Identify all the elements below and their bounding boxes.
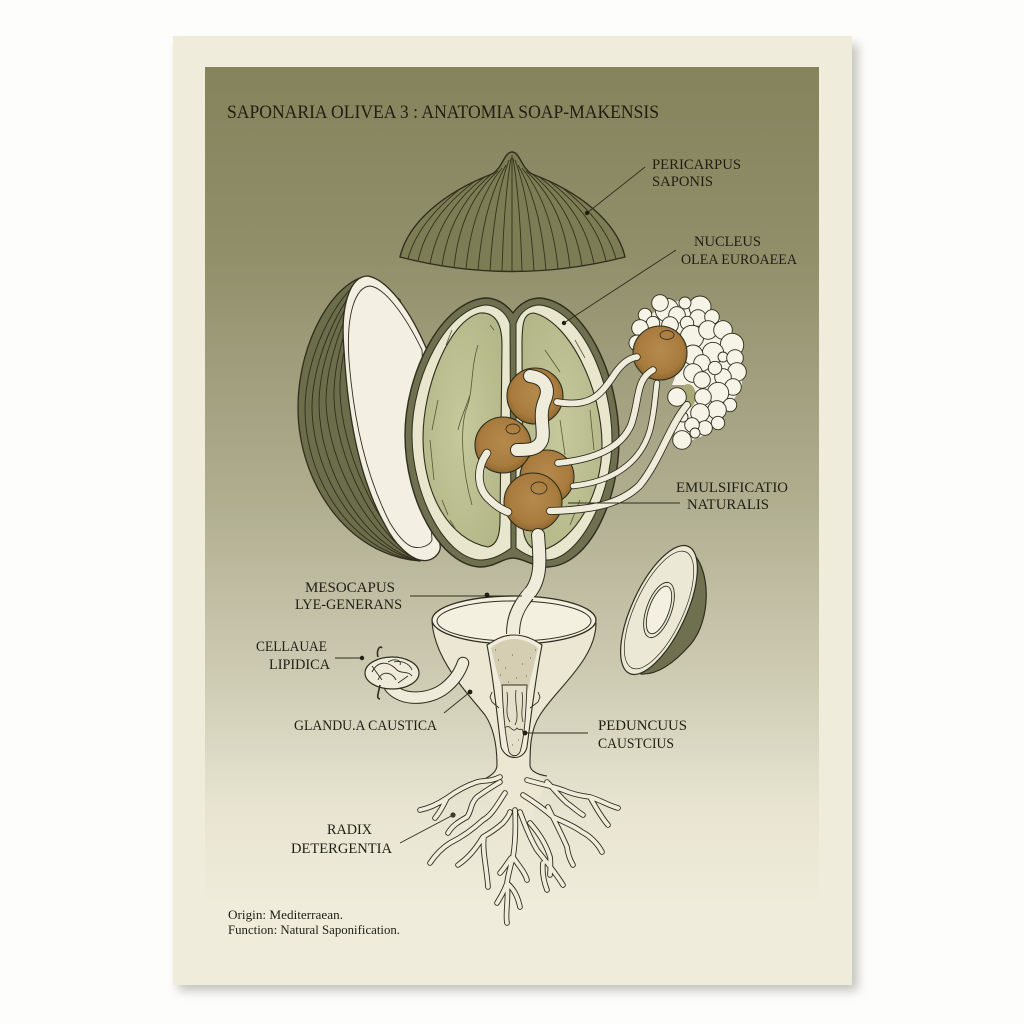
label: cellauae lipidica: CELLAUAE <box>256 639 327 655</box>
label: cellauae lipidica <box>256 639 364 673</box>
illustration: cup, stem and roots <box>365 592 618 923</box>
gland tube fill <box>390 663 463 698</box>
label: pericarpus saponis: PERICARPUS <box>652 157 741 173</box>
shell cream face <box>343 276 440 561</box>
seed chamber tan fill <box>491 639 538 690</box>
roots fill <box>420 777 618 923</box>
label: cellauae lipidica: LIPIDICA <box>269 657 330 673</box>
label: radix detergentia: RADIX <box>327 822 372 838</box>
kidney cell <box>365 647 419 699</box>
label: glandula caustica <box>294 690 472 734</box>
disc hole <box>637 578 681 642</box>
illustration: oil globules and tubes <box>475 326 687 634</box>
footer note: Function: Natural Saponification. <box>228 923 400 937</box>
fruit outer rind <box>405 298 619 567</box>
label: emulsificatio naturalis: EMULSIFICATIO <box>676 480 788 496</box>
foam backing blob <box>640 300 742 445</box>
disc inner rim <box>610 542 708 678</box>
label: pericarpus saponis: SAPONIS <box>652 174 713 190</box>
label: emulsificatio naturalis <box>568 480 788 513</box>
stem entering cup <box>513 595 528 634</box>
peduncle seed chamber <box>487 635 542 758</box>
footer note <box>228 908 400 937</box>
illustration: left half shell <box>298 276 440 561</box>
label: glandula caustica: GLANDU.A CAUSTICA <box>294 718 437 734</box>
title: SAPONARIA OLIVEA 3 : ANATOMIA SOAP-MAKENSIS <box>227 103 659 123</box>
label: mesocapus lye-generans: MESOCAPUS <box>305 580 395 596</box>
foam olive gap <box>680 384 696 408</box>
label: radix detergentia: DETERGENTIA <box>291 841 392 857</box>
globule 4 <box>504 473 562 531</box>
cup rim <box>432 596 596 644</box>
label: peduncuus caustcius: PEDUNCUUS <box>598 718 687 734</box>
illustration: pericarp cap <box>400 152 625 273</box>
fruit cream flesh left <box>412 305 511 560</box>
connecting tubes outline <box>479 357 687 634</box>
label: peduncuus caustcius: CAUSTCIUS <box>598 736 674 752</box>
label: pericarpus saponis <box>585 157 741 215</box>
label: nucleus olea euroaeea <box>562 234 797 325</box>
illustration: cut disc slice <box>605 535 713 685</box>
paper sheet <box>173 36 852 985</box>
cup rim inner <box>437 601 591 641</box>
cup body fill <box>432 622 596 840</box>
gland tube outline <box>390 663 463 698</box>
cup body outline <box>432 622 596 781</box>
disc outer side <box>641 549 706 674</box>
footer note: Origin: Mediterraean. <box>228 908 343 922</box>
label: peduncuus caustcius <box>523 718 687 752</box>
globule 2 <box>475 417 531 473</box>
label: radix detergentia <box>291 812 456 857</box>
disc face <box>605 535 713 685</box>
background panel <box>205 67 819 907</box>
label: nucleus olea euroaeea: OLEA EUROAEEA <box>681 252 797 268</box>
left green lobe <box>423 313 502 547</box>
label: mesocapus lye-generans <box>295 580 522 613</box>
label: emulsificatio naturalis: NATURALIS <box>687 497 769 513</box>
lobe veins <box>430 325 594 530</box>
shell outer rind <box>298 276 440 561</box>
roots outline <box>420 777 618 923</box>
collar <box>490 692 540 708</box>
illustration: emulsifying foam cluster <box>629 295 746 449</box>
label: nucleus olea euroaeea: NUCLEUS <box>694 234 761 250</box>
globule 1 <box>507 368 563 424</box>
paper sheet shadow <box>178 44 858 991</box>
shell inner line <box>348 286 432 548</box>
fruit cream flesh right <box>516 305 612 560</box>
right green lobe <box>522 313 602 550</box>
seed chamber inner <box>502 685 527 756</box>
inner squiggles <box>505 690 523 732</box>
connecting tubes fill <box>479 357 687 634</box>
globule 3 <box>520 450 574 504</box>
stipple dots <box>495 650 536 745</box>
globule top right <box>633 326 687 380</box>
label: mesocapus lye-generans: LYE-GENERANS <box>295 597 402 613</box>
illustration: central open fruit <box>405 298 619 567</box>
